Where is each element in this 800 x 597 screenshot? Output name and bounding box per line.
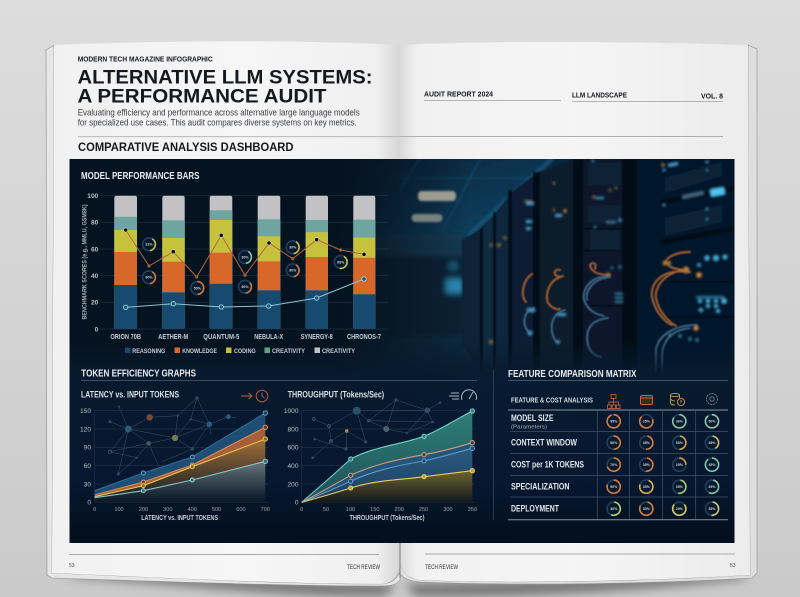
x axis ticks: 300 xyxy=(163,507,172,513)
network decoration xyxy=(311,398,441,459)
x axis ticks: 300 xyxy=(443,507,453,513)
icon: hierarchy xyxy=(608,394,620,408)
spine xyxy=(399,543,401,578)
line: yellow xyxy=(95,437,267,497)
kicker: MODERN TECH MAGAZINE INFOGRAPHIC xyxy=(78,55,213,64)
matrix title: FEATURE COMPARISON MATRIX xyxy=(508,369,637,380)
line: orange series xyxy=(124,228,366,279)
row: cost per 1k tokens: 35% xyxy=(708,463,716,467)
icon: database with coin xyxy=(670,393,685,406)
bar: ORION 70B xyxy=(114,196,137,329)
row: specialization xyxy=(511,478,720,495)
title xyxy=(78,66,372,107)
chart: model performance bars xyxy=(81,171,388,355)
section heading: token efficiency: TOKEN EFFICIENCY GRAPHS xyxy=(81,369,196,380)
ceiling xyxy=(376,159,550,238)
y axis ticks: 80 xyxy=(91,220,99,227)
chart: latency xyxy=(80,390,270,522)
row: specialization: 35% xyxy=(643,485,651,489)
y axis ticks: 100 xyxy=(87,193,99,200)
rack cables xyxy=(523,252,697,372)
row: model size: 95% xyxy=(610,420,618,424)
y axis ticks xyxy=(87,193,99,333)
percentage rings: 90% xyxy=(145,276,153,280)
y axis ticks: 0 xyxy=(295,500,299,507)
row: specialization: 35% xyxy=(676,485,684,489)
divider xyxy=(492,370,494,520)
x axis labels: AETHER-M xyxy=(158,334,188,341)
legend: REASONING xyxy=(132,348,165,355)
x axis labels: CHRONOS-7 xyxy=(347,334,381,341)
row: context window: CONTEXT WINDOW xyxy=(511,438,578,448)
icon: speed gauge xyxy=(449,390,476,400)
bar: NEBULA-X xyxy=(258,196,280,329)
row: model size xyxy=(511,413,719,430)
right page header xyxy=(424,90,723,102)
title: ALTERNATIVE LLM SYSTEMS: xyxy=(78,66,372,88)
right page xyxy=(400,42,750,582)
line: blue xyxy=(302,446,474,502)
line: blue series xyxy=(124,277,366,309)
panel: feature comparison matrix xyxy=(508,369,728,520)
line: orange xyxy=(302,440,474,502)
row: context window xyxy=(511,435,719,450)
y axis ticks: 30 xyxy=(84,481,91,488)
chart title: MODEL PERFORMANCE BARS xyxy=(81,171,200,182)
footer: right page: TECH REVIEW xyxy=(425,565,458,571)
percentage rings: 31% xyxy=(145,243,153,247)
line: teal xyxy=(95,459,267,498)
intro text: for specialized use cases. This audit compares diverse systems on key metrics. xyxy=(78,118,357,128)
rack lights xyxy=(489,160,727,344)
x axis ticks: 400 xyxy=(188,507,197,513)
x axis ticks: 200 xyxy=(139,507,148,513)
rack panels xyxy=(588,162,722,250)
footer: left page xyxy=(69,554,380,571)
page stack right xyxy=(400,45,757,584)
legend: KNOWLEDGE xyxy=(182,348,217,355)
footer: right page: 53 xyxy=(730,563,736,569)
x axis ticks xyxy=(93,507,270,513)
percentage rings: 30% xyxy=(241,255,249,259)
page stack left xyxy=(46,45,400,586)
row: specialization: 90% xyxy=(610,485,618,489)
percentage rings: 30% xyxy=(241,285,249,289)
percentage rings: 08% xyxy=(337,260,345,264)
x axis ticks: 50 xyxy=(323,507,329,513)
y axis ticks: 150 xyxy=(80,408,91,415)
chart title: THROUGHPUT (Tokens/Sec) xyxy=(288,390,384,400)
percentage rings xyxy=(140,236,349,296)
y axis ticks: 40 xyxy=(91,273,99,280)
right page header: LLM LANDSCAPE xyxy=(572,90,627,100)
bar: SYNERGY-8 xyxy=(306,196,328,329)
x axis labels: NEBULA-X xyxy=(254,334,283,341)
y axis ticks: 20 xyxy=(91,300,99,307)
row: model size: 50% xyxy=(708,420,716,424)
x axis ticks: 500 xyxy=(212,507,221,513)
x axis labels: ORION 70B xyxy=(110,334,141,341)
legend: CODING xyxy=(234,348,256,355)
y axis ticks: 800 xyxy=(287,426,299,433)
row: context window: 50% xyxy=(676,441,684,445)
ceiling lights xyxy=(412,191,456,222)
row: deployment: DEPLOYMENT xyxy=(511,504,559,514)
legend: CREATIVITY xyxy=(322,348,356,355)
row: cost per 1k tokens: 35% xyxy=(643,463,651,467)
y axis ticks: 600 xyxy=(287,445,299,452)
matrix header label: FEATURE & COST ANALYSIS xyxy=(511,397,593,404)
percentage rings: 30% xyxy=(289,246,297,250)
x axis ticks xyxy=(300,507,477,513)
server racks xyxy=(462,159,735,374)
row: cost per 1k tokens: 70% xyxy=(610,463,618,467)
row: deployment: 29% xyxy=(676,507,684,511)
bottom fade xyxy=(70,340,734,543)
percentage rings: 50% xyxy=(194,286,202,290)
row: model size: 36% xyxy=(676,420,684,424)
y axis ticks: 1000 xyxy=(284,408,299,415)
left page xyxy=(52,41,400,584)
row: deployment: 39% xyxy=(708,507,716,511)
x axis ticks: 100 xyxy=(114,507,124,513)
book shadow xyxy=(70,572,745,596)
x axis caption: THROUGHPUT (Tokens/Sec) xyxy=(350,515,424,522)
row: cost per 1k tokens: 25% xyxy=(676,463,684,467)
right page header: AUDIT REPORT 2024 xyxy=(424,90,493,99)
row: cost per 1k tokens xyxy=(511,458,719,472)
bar: AETHER-M xyxy=(162,196,185,329)
footer: left page: TECH REVIEW xyxy=(347,565,380,571)
x axis ticks: 700 xyxy=(261,507,270,513)
line: yellow xyxy=(302,468,474,502)
title: A PERFORMANCE AUDIT xyxy=(78,85,327,107)
x axis ticks: 350 xyxy=(468,507,477,513)
right page header: VOL. 8 xyxy=(701,92,723,100)
intro text: Evaluating efficiency and performance across alternative large language models xyxy=(78,108,360,118)
chart title: LATENCY vs. INPUT TOKENS xyxy=(81,390,179,400)
percentage rings: 30% xyxy=(289,269,297,273)
icon: card xyxy=(640,396,652,404)
y axis ticks: 0 xyxy=(87,500,91,507)
server room photo xyxy=(376,159,734,371)
row: model size: 25% xyxy=(643,420,651,424)
y axis ticks: 200 xyxy=(287,481,299,488)
y axis label: BENCHMARK SCORES (e.g., MMLU, GSM8K) xyxy=(82,204,88,320)
x axis ticks: 250 xyxy=(419,507,428,513)
x axis labels xyxy=(110,334,381,341)
row: context window: 50% xyxy=(610,441,618,445)
corridor xyxy=(376,230,470,334)
x axis ticks: 150 xyxy=(370,507,379,513)
intro text xyxy=(78,108,360,128)
x axis labels: SYNERGY-8 xyxy=(301,334,333,341)
row: model size: (Parameters) xyxy=(511,424,547,430)
y axis ticks xyxy=(80,408,91,507)
y axis ticks: 60 xyxy=(84,463,91,470)
y axis ticks: 0 xyxy=(95,326,99,333)
y axis ticks xyxy=(284,408,299,507)
legend: CREATIVITY xyxy=(272,348,306,355)
icon: arrow and clock xyxy=(241,390,268,402)
legend xyxy=(125,348,356,355)
network decoration xyxy=(108,396,236,476)
row: cost per 1k tokens: COST per 1K TOKENS xyxy=(511,460,584,470)
row: context window: 35% xyxy=(643,441,651,445)
x axis ticks: 600 xyxy=(236,507,246,513)
footer: left page: 53 xyxy=(69,563,75,569)
y axis ticks: 60 xyxy=(91,246,99,253)
panel: dashboard xyxy=(70,155,735,543)
line: blue xyxy=(95,411,267,491)
footer: right page xyxy=(425,554,736,571)
chart: throughput xyxy=(284,390,477,522)
row: specialization: 29% xyxy=(708,485,716,489)
section heading: COMPARATIVE ANALYSIS DASHBOARD xyxy=(78,141,294,154)
x axis caption: LATENCY vs. INPUT TOKENS xyxy=(141,515,218,522)
x axis labels: QUANTUM-5 xyxy=(203,334,239,341)
row: context window: 38% xyxy=(708,441,716,445)
bar: CHRONOS-7 xyxy=(353,196,375,329)
left fade xyxy=(70,159,470,543)
x axis ticks: 0 xyxy=(93,507,96,513)
y axis ticks: 90 xyxy=(84,445,91,452)
line: teal xyxy=(302,409,474,502)
y axis ticks: 120 xyxy=(80,426,91,433)
area series xyxy=(95,413,265,495)
top rule xyxy=(78,136,723,138)
x axis ticks: 0 xyxy=(300,507,303,513)
bar: QUANTUM-5 xyxy=(210,196,232,329)
row: deployment: 30% xyxy=(643,507,651,511)
row: deployment: 30% xyxy=(610,507,618,511)
row: deployment xyxy=(511,499,719,518)
x axis ticks: 200 xyxy=(395,507,404,513)
table grid xyxy=(508,409,728,411)
line: orange xyxy=(95,425,267,495)
row: model size: MODEL SIZE xyxy=(511,413,554,423)
row: specialization: SPECIALIZATION xyxy=(511,482,570,492)
x axis ticks: 100 xyxy=(346,507,355,513)
area series xyxy=(302,411,472,502)
icon: gear xyxy=(706,394,718,404)
y axis ticks: 400 xyxy=(287,463,299,470)
